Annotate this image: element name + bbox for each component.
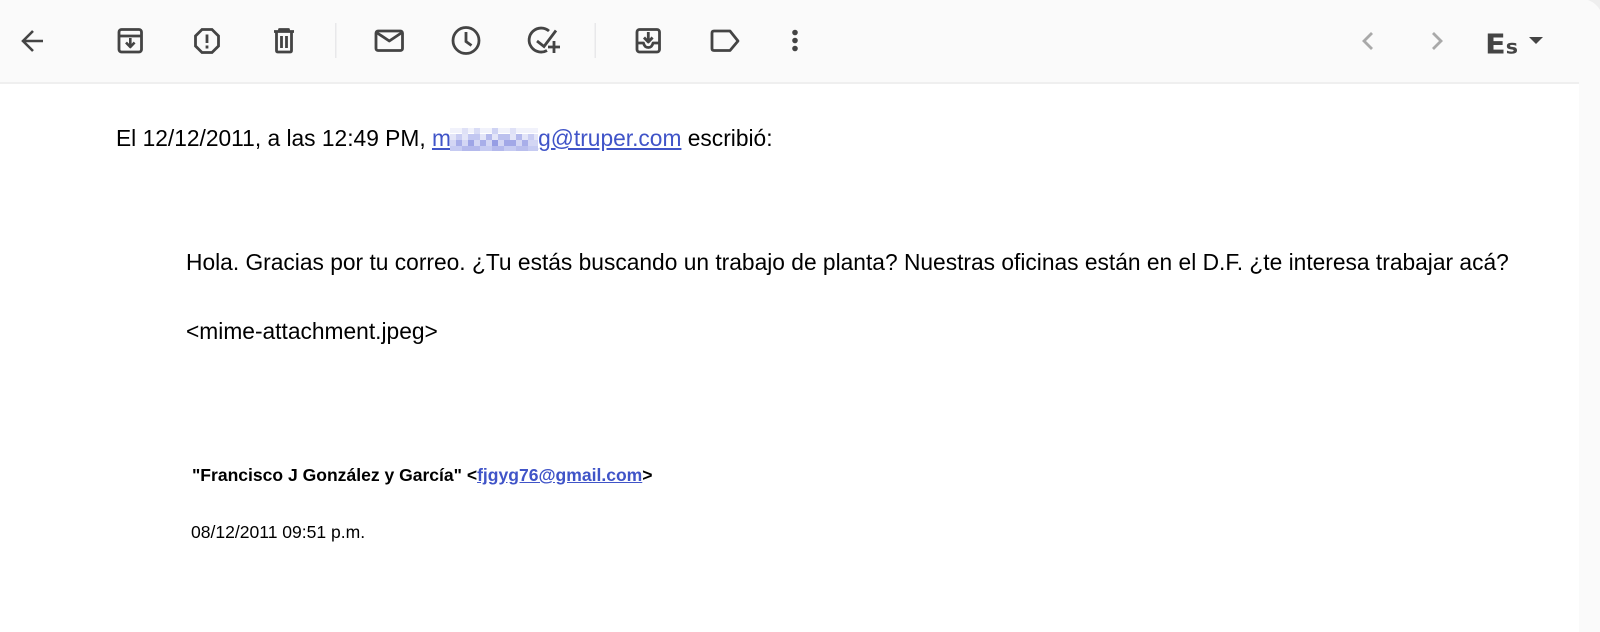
icon: back arrow [23,31,43,51]
icon: language caret [1529,37,1543,44]
icon: archive [119,30,142,52]
icon: add task [529,28,560,53]
icon: previous [1364,33,1372,49]
redacted address mosaic [450,128,538,151]
right margin strip [1579,0,1600,632]
icon: trash [274,30,294,52]
icon: more menu [792,30,798,51]
message body: Hola. Gracias por tu correo. ¿Tu estás buscando un trabajo de planta? Nuestras oficinas están en el D.F. ¿te interesa trabajar acá? [186,249,1509,275]
attachment placeholder: <mime-attachment.jpeg> [186,318,438,344]
sender line: "Francisco J González y García" <fjgyg76@gmail.com> [192,465,653,485]
icon: spam [196,30,218,52]
icon: next [1433,33,1441,49]
icon: clock [453,28,479,54]
icon: move to inbox [637,30,660,52]
language code: Es [1485,28,1518,60]
icon: mail [376,31,402,50]
sent date: 08/12/2011 09:51 p.m. [191,522,365,542]
icon: label [712,31,738,50]
reply header line: El 12/12/2011, a las 12:49 PM, m g@truper.com escribió: [116,125,773,151]
toolbar [0,0,1600,84]
